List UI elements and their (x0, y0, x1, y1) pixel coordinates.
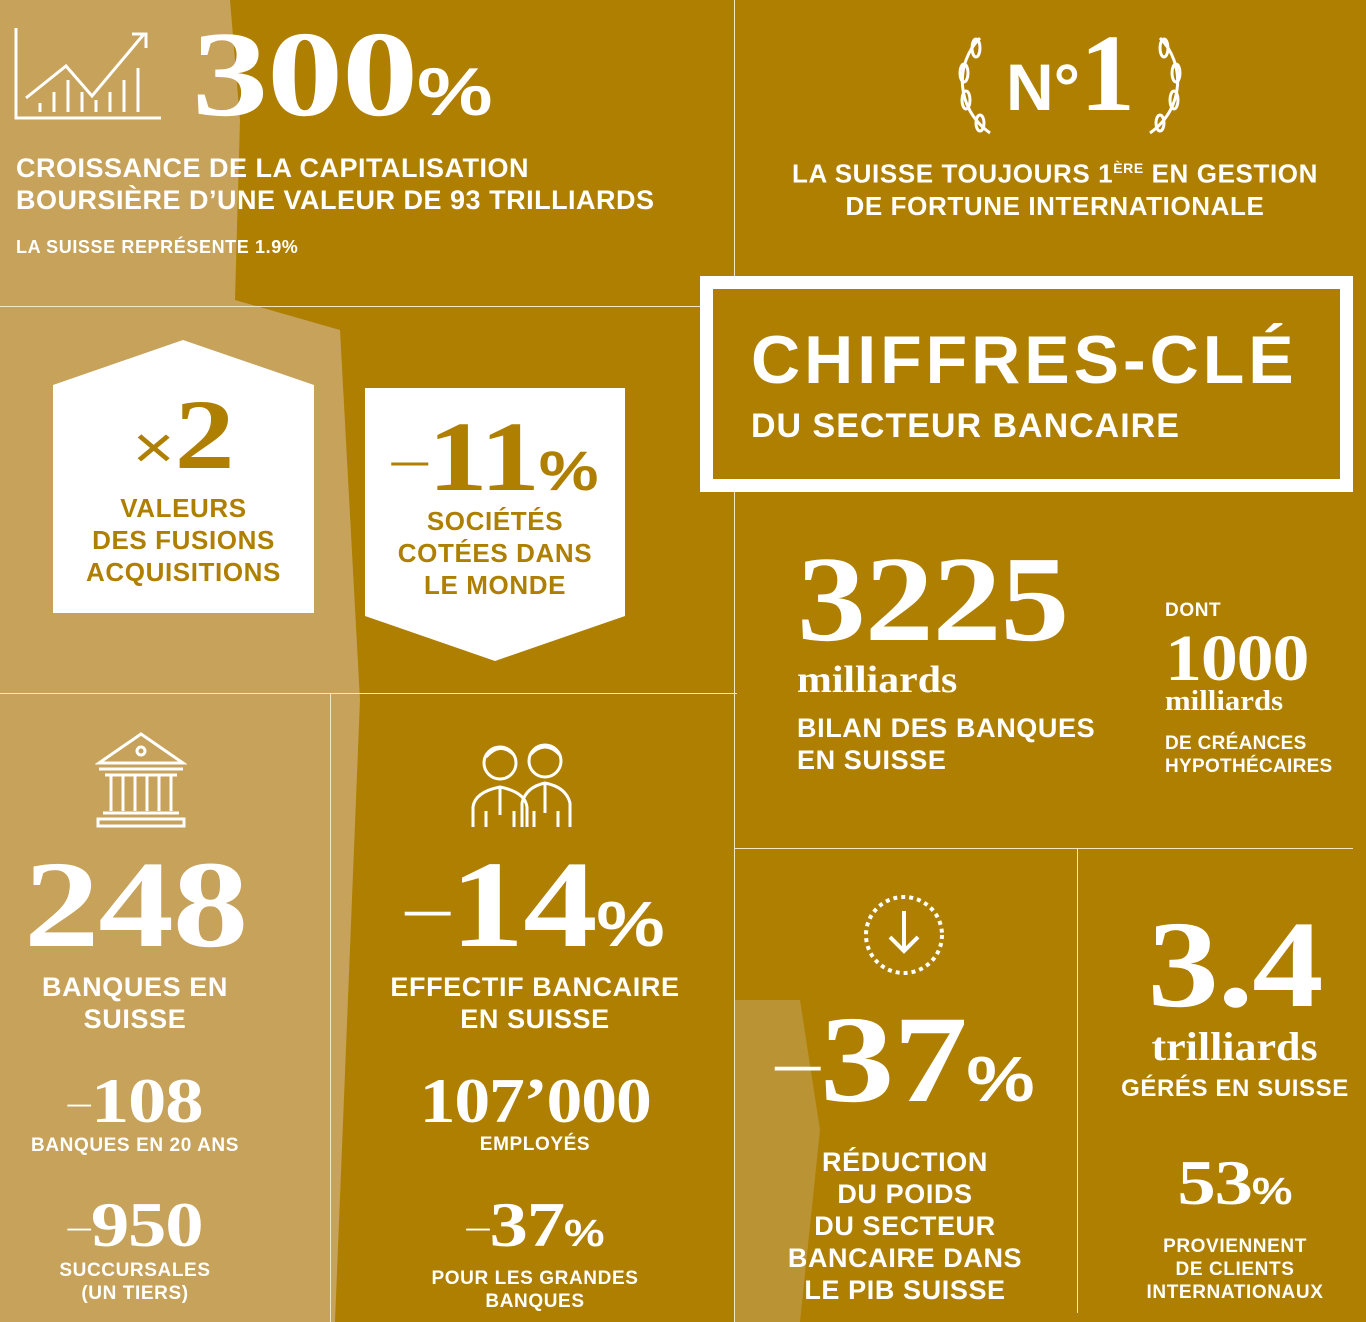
text: croissance: CROISSANCE DE LA CAPITALISATION (16, 153, 529, 183)
headline: 300%: 300% (192, 7, 493, 142)
stat: -14%: –14% (405, 836, 665, 973)
stat: 3.4 trilliards: trilliards (1152, 1024, 1318, 1069)
stat: -108: BANQUES EN 20 ANS (31, 1135, 239, 1156)
icon: people (472, 744, 572, 827)
panel: x2 (53, 340, 314, 613)
title box: DU SECTEUR BANCAIRE (751, 407, 1180, 445)
stat: -950: SUCCURSALES (59, 1260, 211, 1281)
stat: -37% PIB: DU SECTEUR (814, 1211, 996, 1241)
stat: -950: –950 (68, 1189, 202, 1260)
stat: 1000 (1165, 600, 1333, 777)
icon: bank (95, 732, 187, 828)
icon: down arrow circle (864, 895, 944, 975)
stat: 248: SUISSE (84, 1004, 186, 1034)
text: suisse 1ère: DE FORTUNE INTERNATIONALE (846, 191, 1264, 221)
stat: -37% grandes banques: POUR LES GRANDES (431, 1268, 638, 1289)
icon: laurel N°1: N°1 (1006, 12, 1134, 134)
stat: 107'000: 107’000 (419, 1065, 651, 1136)
stat: -950: (UN TIERS) (81, 1283, 189, 1304)
text: suisse 1.9%: LA SUISSE REPRÉSENTE 1.9% (16, 237, 298, 257)
stat: 1000: DONT (1165, 600, 1221, 621)
stat: -108: –108 (68, 1065, 202, 1136)
stat: 53%: DE CLIENTS (1176, 1259, 1294, 1280)
stat: -37% grandes banques: BANQUES (485, 1291, 585, 1312)
panel: -11%: COTÉES DANS (398, 538, 592, 568)
panel: -11%: –11% (392, 401, 598, 512)
panel: x2: ×2 (133, 379, 234, 490)
stat: 107'000: EMPLOYÉS (480, 1134, 590, 1155)
text: suisse 1ère (792, 159, 1318, 221)
stat: -14%: EN SUISSE (460, 1004, 610, 1034)
panel: -11%: LE MONDE (424, 570, 566, 600)
stat: -37% PIB: BANCAIRE DANS (788, 1243, 1022, 1273)
stat: 3.4 trilliards (1121, 896, 1349, 1102)
text: croissance (16, 153, 655, 215)
stat: -950 (59, 1189, 211, 1304)
stat: -14% (390, 836, 680, 1034)
stat: 53%: PROVIENNENT (1163, 1236, 1307, 1257)
stat: 3225 (797, 532, 1095, 775)
panel: x2: DES FUSIONS (92, 525, 275, 555)
stat: 248 (23, 836, 247, 1034)
stat: 3.4 trilliards: 3.4 (1148, 896, 1322, 1033)
stat: 1000: DE CRÉANCES (1165, 733, 1307, 754)
title box (700, 276, 1353, 492)
panel: -11%: SOCIÉTÉS (427, 506, 563, 536)
panel: x2: VALEURS (120, 493, 247, 523)
stat: -37% PIB: RÉDUCTION (822, 1147, 988, 1177)
icon: growth chart (14, 28, 161, 120)
stat: 3225: BILAN DES BANQUES (797, 713, 1095, 743)
stat: 53% (1147, 1147, 1323, 1303)
stat: -37% PIB (774, 991, 1035, 1305)
text: croissance: BOURSIÈRE D’UNE VALEUR DE 93 TRILLIARDS (16, 185, 655, 215)
text: suisse 1ère: LA SUISSE TOUJOURS 1ÈRE EN GESTION (792, 159, 1318, 189)
stat: 1000: milliards (1165, 686, 1283, 717)
stat: -37% PIB: DU POIDS (837, 1179, 973, 1209)
stat: 248: BANQUES EN (42, 972, 228, 1002)
stat: 53%: 53% (1178, 1147, 1292, 1218)
stat: -37% PIB: –37% (775, 991, 1035, 1128)
icon: laurel N°1 (958, 12, 1182, 134)
stat: 3225: EN SUISSE (797, 745, 946, 775)
stat: 3225: 3225 (797, 532, 1068, 667)
title box: CHIFFRES-CLÉ (751, 322, 1298, 398)
stat: 53%: INTERNATIONAUX (1147, 1282, 1323, 1303)
stat: 1000: HYPOTHÉCAIRES (1165, 756, 1333, 777)
stat: 3.4 trilliards: GÉRÉS EN SUISSE (1121, 1075, 1349, 1102)
stat: -37% grandes banques (431, 1189, 638, 1312)
stat: -37% PIB: LE PIB SUISSE (804, 1275, 1006, 1305)
panel: x2: ACQUISITIONS (86, 557, 281, 587)
stat: 3225: milliards (797, 659, 957, 701)
panel: -11% (365, 388, 625, 661)
stat: -14%: EFFECTIF BANCAIRE (390, 972, 680, 1002)
stat: 248: 248 (23, 836, 247, 973)
stat: -108 (31, 1065, 239, 1156)
stat: -37% grandes banques: –37% (466, 1189, 604, 1260)
stat: 1000: 1000 (1165, 622, 1308, 695)
